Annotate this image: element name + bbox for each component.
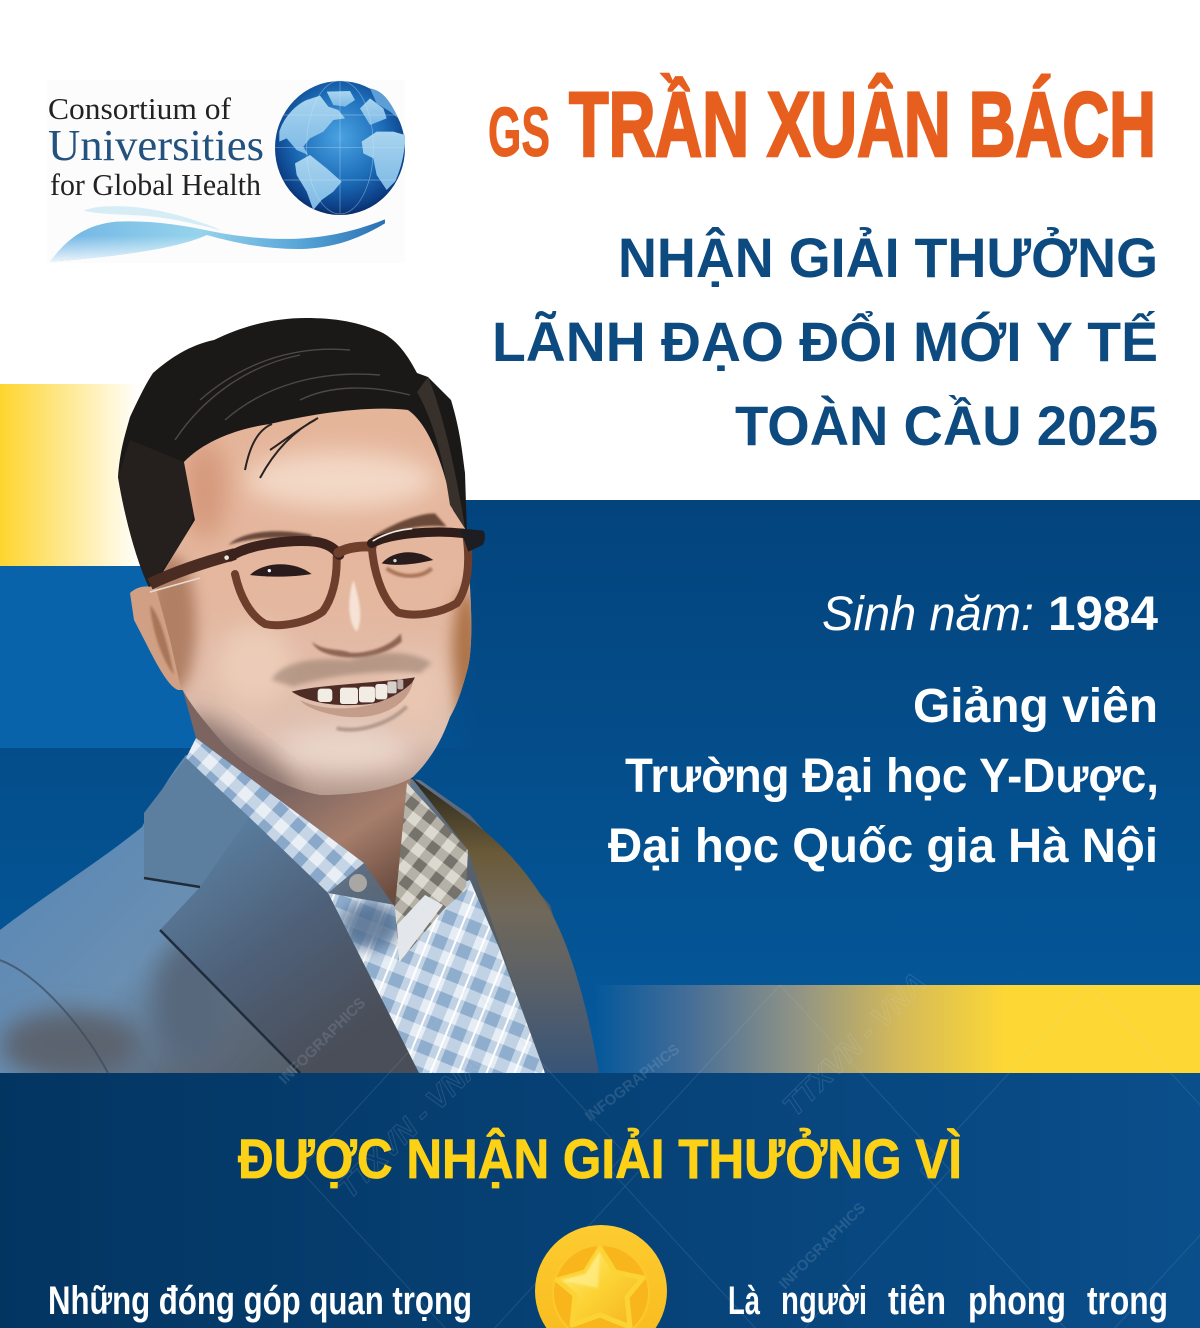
logo wave (50, 206, 385, 262)
watermark: INFOGRAPHICS (776, 1199, 869, 1293)
neck (180, 680, 411, 907)
position and workplace: Giảng viên (913, 680, 1158, 733)
logo wordmark: Universities (48, 121, 264, 170)
under eye shadow (387, 568, 432, 576)
dark blue band left (0, 566, 440, 1073)
logo wordmark (48, 91, 264, 202)
lower hair tone (118, 440, 197, 587)
right reason text: Là (728, 1279, 761, 1323)
shirt collar left (186, 738, 364, 893)
blue panel right (440, 500, 1200, 1073)
subtitle: award name: NHẬN GIẢI THƯỞNG (618, 226, 1158, 289)
watermark: TTXVN - VNA (332, 1048, 488, 1205)
shirt collar right (395, 783, 468, 963)
nose (349, 580, 360, 632)
watermark: INFOGRAPHICS (276, 994, 369, 1088)
eyebrows (228, 531, 312, 545)
birth year (822, 588, 1158, 641)
moustache shadow (272, 653, 432, 687)
title: GS Trần Xuân Bách: GS (488, 93, 550, 171)
left reason text: Những đóng góp quan trọng (48, 1279, 472, 1323)
teeth (318, 679, 403, 704)
light blue band left (0, 566, 480, 748)
watermark: TTXVN - VNA (777, 966, 933, 1123)
jacket lapel lower (160, 817, 419, 1073)
shirt shadow (340, 901, 400, 949)
watermark: INFOGRAPHICS (582, 1041, 683, 1125)
subtitle: award name: LÃNH ĐẠO ĐỔI MỚI Y TẾ (492, 310, 1158, 373)
eyes (250, 564, 312, 577)
yellow gradient band left (0, 384, 140, 566)
hair side and strands (175, 349, 465, 528)
glasses (224, 528, 485, 625)
logo globe (275, 81, 405, 215)
birth year: Sinh năm: (822, 588, 1034, 641)
jacket collar (144, 758, 249, 887)
lapel edges (144, 878, 300, 1073)
portrait of professor (0, 318, 599, 1080)
subtitle: award name (492, 226, 1158, 457)
logo wordmark: for Global Health (50, 167, 261, 202)
sleeve seam (0, 960, 108, 1073)
mouth (292, 677, 415, 705)
right reason text (728, 1279, 1168, 1323)
jacket tonal variation (0, 940, 226, 1080)
icon: gold star coin (535, 1225, 667, 1328)
facial features (224, 513, 485, 730)
watermark (276, 966, 1200, 1328)
face (155, 409, 471, 795)
face shading (156, 439, 472, 790)
shirt body (328, 880, 545, 1073)
yellow gradient band right (596, 985, 1200, 1073)
temple highlight (150, 578, 200, 592)
right reason text: trong (1087, 1279, 1168, 1323)
collar tip highlight (397, 895, 443, 963)
logo background (47, 80, 405, 263)
bottom panel (0, 1073, 1200, 1328)
position and workplace (608, 680, 1159, 873)
birth year: 1984 (1048, 588, 1158, 641)
collar button (349, 874, 367, 892)
logo wordmark: Consortium of (48, 91, 232, 126)
position and workplace: Trường Đại học Y-Dược, (625, 750, 1159, 803)
hair (118, 318, 467, 587)
right reason text: tiên (888, 1279, 946, 1323)
position and workplace: Đại học Quốc gia Hà Nội (608, 820, 1158, 873)
jacket right side (411, 777, 599, 1073)
right reason text: phong (968, 1279, 1066, 1323)
glasses temple (150, 554, 235, 584)
lower lip (300, 682, 413, 717)
ear (130, 586, 190, 690)
jacket (0, 755, 599, 1073)
ear inner (150, 605, 174, 675)
logo: Consortium of Universities for Global Health (47, 80, 405, 263)
right reason text: người (781, 1279, 867, 1323)
section heading: ĐƯỢC NHẬN GIẢI THƯỞNG VÌ (238, 1127, 962, 1190)
subtitle: award name: TOÀN CẦU 2025 (735, 394, 1158, 457)
